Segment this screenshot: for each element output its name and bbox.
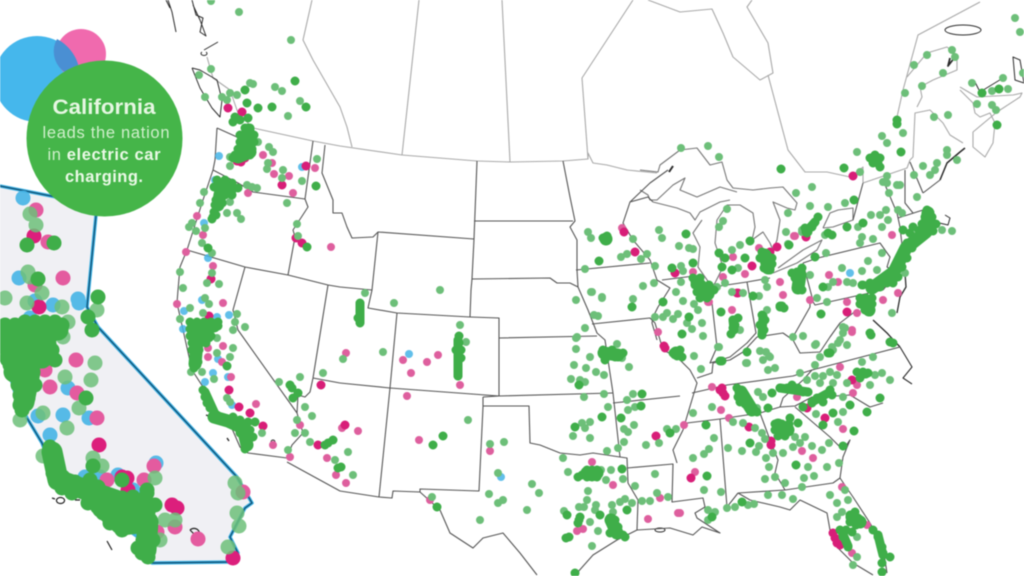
dots: blue charging sites on main map bbox=[183, 156, 850, 477]
headline: California: California bbox=[52, 96, 156, 119]
panel: California inset map bbox=[0, 185, 252, 563]
circle overlap: darker blue bbox=[54, 39, 80, 79]
dots: solid green clusters on main map bbox=[190, 81, 999, 573]
dots: merged corridor clusters on main map bbox=[205, 222, 883, 555]
map: dark coast detail and islands bbox=[166, 0, 1024, 532]
inset: state shape bbox=[0, 185, 252, 563]
circle: blue bbox=[0, 36, 80, 122]
text: charging: charging. bbox=[65, 168, 143, 186]
circle: pink bbox=[56, 29, 106, 79]
callout: green headline circle bbox=[26, 60, 182, 216]
map: Great Lakes shoreline bbox=[640, 148, 853, 287]
inset: blue charging sites bbox=[19, 198, 156, 490]
inset: merged green clusters bbox=[3, 330, 148, 550]
map: Canadian province borders and coast bbox=[207, 0, 1022, 183]
inset: island outlines bbox=[52, 497, 200, 550]
text: leads the nation: leads the nation bbox=[42, 124, 170, 142]
dots: magenta high-density sites on main map bbox=[209, 108, 853, 545]
inset: pink charging sites bbox=[35, 210, 243, 539]
inset: magenta charging sites bbox=[34, 236, 233, 558]
callout: overlapping circles behind headline bbox=[0, 29, 106, 122]
inset: solid green clusters bbox=[5, 243, 155, 557]
map: US state borders bbox=[177, 128, 940, 576]
dots: pink charging sites on main map bbox=[177, 155, 898, 553]
inset: state outline core bbox=[0, 185, 252, 563]
inset: pale green sites bbox=[5, 214, 239, 547]
dots: merged metro-area clusters on main map bbox=[195, 130, 928, 533]
text: in electric car: in electric car bbox=[48, 146, 161, 164]
